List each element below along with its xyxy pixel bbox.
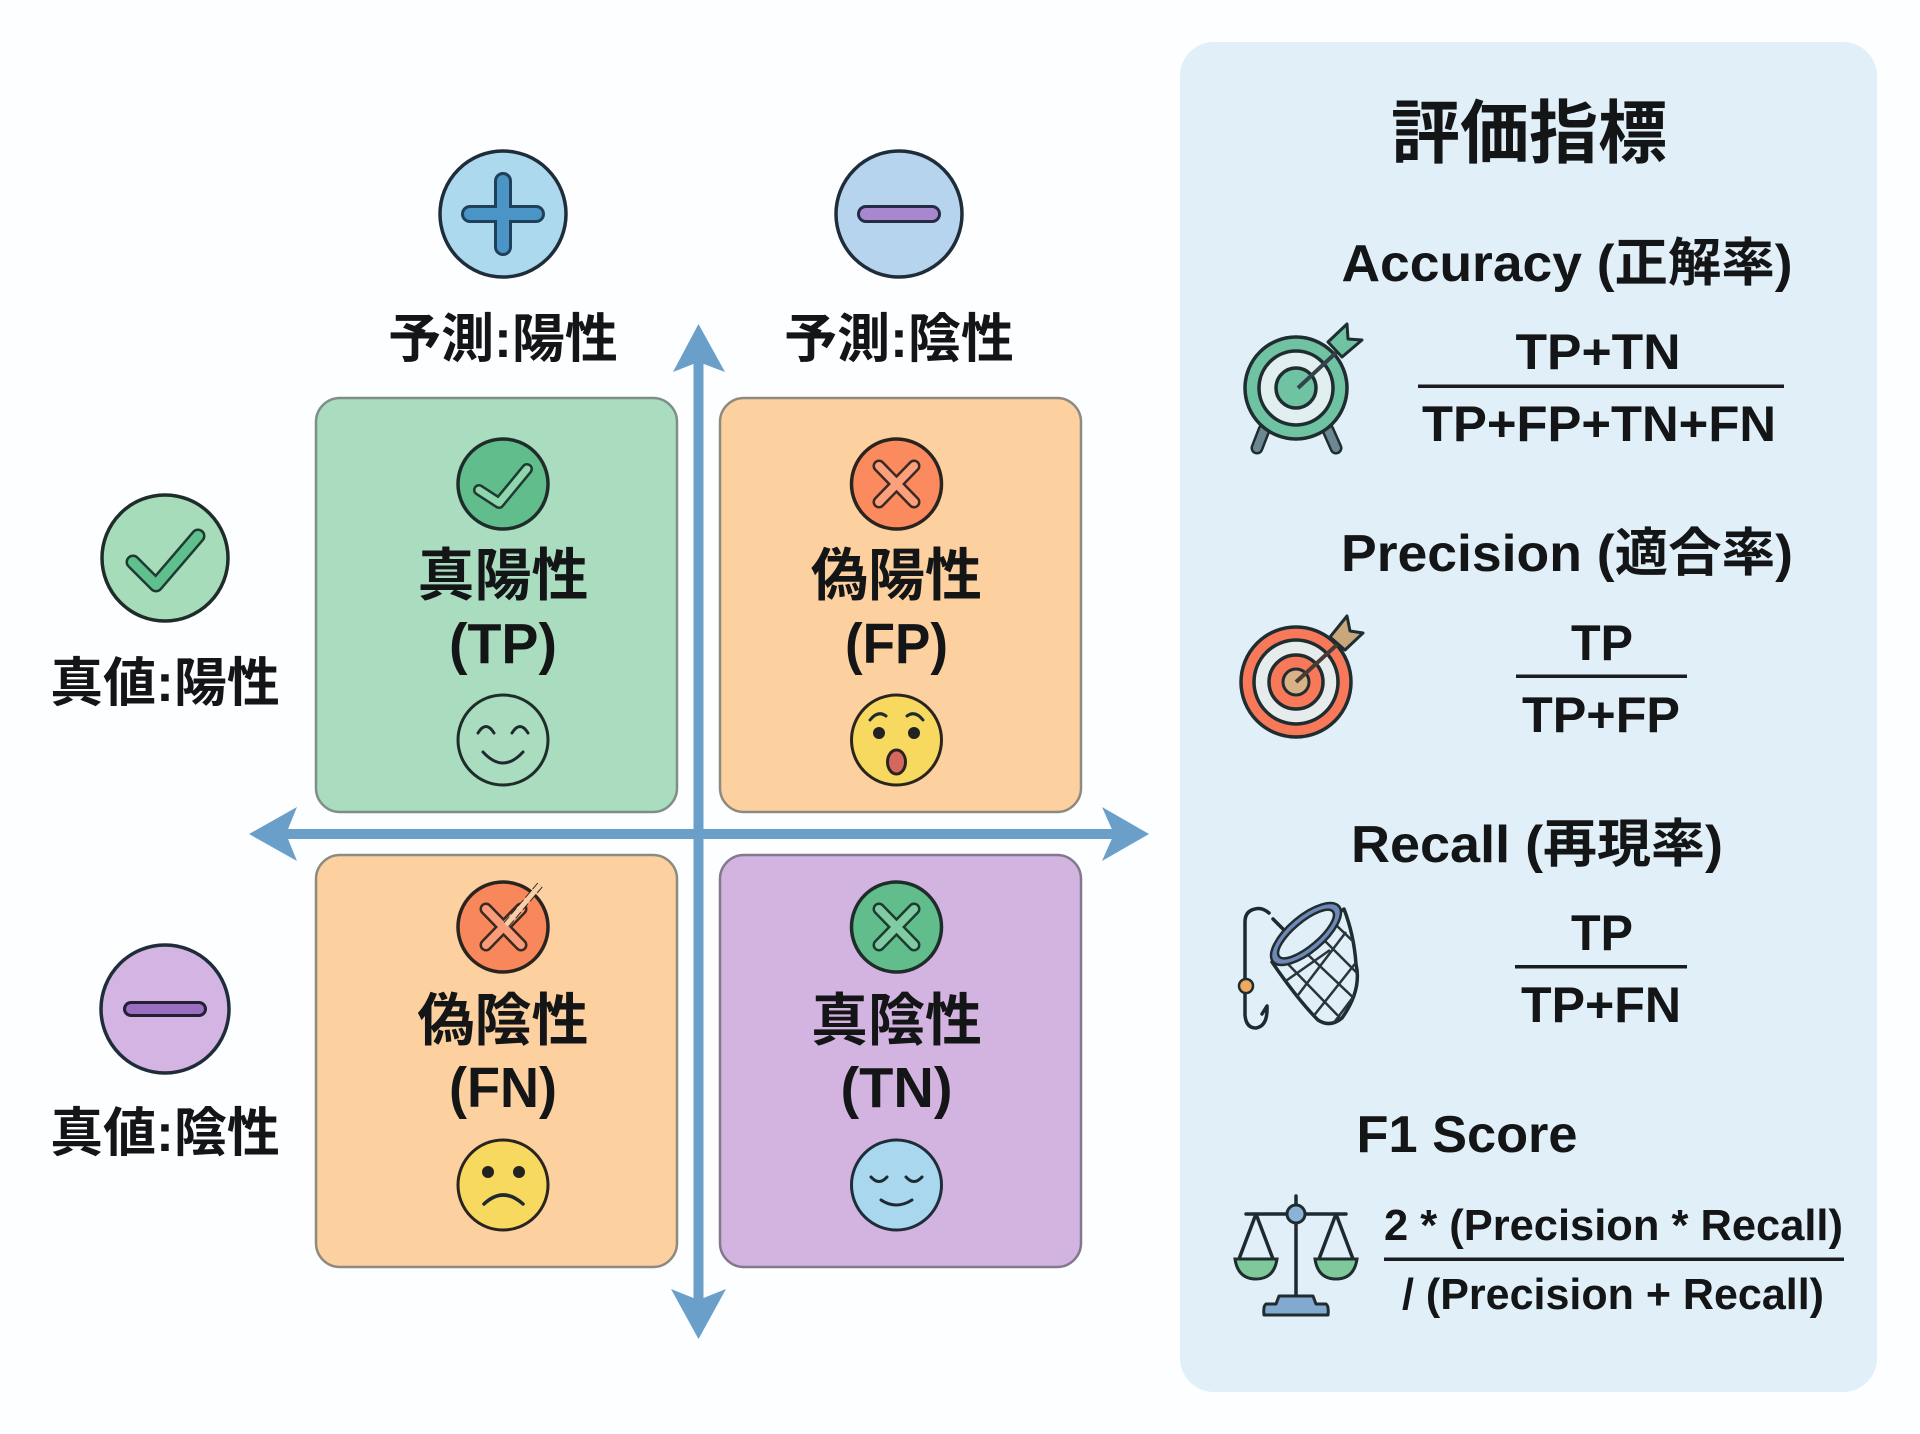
metric: accuracy (1245, 235, 1792, 452)
heading: actual positive: 真値:陽性 (50, 654, 280, 713)
icon: check (458, 439, 548, 529)
formula: precision: TP+FP (1522, 687, 1680, 743)
icon: smiling face (458, 695, 548, 785)
icon: cross with scratch (458, 882, 548, 972)
heading: actual negative: 真値:陰性 (50, 1104, 280, 1163)
label: TN: (TN) (840, 1056, 952, 1120)
formula: F1 score (1384, 1201, 1844, 1319)
panel: false negative (316, 855, 677, 1267)
formula: accuracy: TP+TN (1516, 324, 1680, 380)
icon: balance scales (1235, 1196, 1357, 1315)
label: false positive: 偽陽性 (811, 544, 982, 608)
metric: F1 score (1235, 1106, 1844, 1319)
label: true positive: 真陽性 (418, 544, 588, 608)
formula: F1 score: / (Precision + Recall) (1402, 1270, 1824, 1319)
panel: true negative (720, 855, 1081, 1267)
formula: recall: TP+FN (1521, 977, 1681, 1033)
heading: predicted negative: 予測:陰性 (784, 310, 1014, 369)
formula: precision: TP (1571, 615, 1633, 671)
formula: accuracy: TP+FP+TN+FN (1422, 396, 1776, 452)
label: TP: (TP) (449, 612, 557, 676)
label: false negative: 偽陰性 (418, 989, 588, 1053)
label: true negative: 真陰性 (811, 989, 982, 1053)
formula: recall: TP (1571, 905, 1633, 961)
icon: actual positive check (102, 495, 228, 621)
arrow: horizontal axis (249, 807, 1149, 861)
metric: precision (1241, 525, 1793, 743)
metric: recall (1239, 816, 1723, 1033)
icon: green target (1245, 324, 1362, 448)
icon: surprised face (852, 695, 942, 785)
label: F1 score: F1 Score (1356, 1106, 1578, 1164)
formula: accuracy (1418, 324, 1784, 452)
panel: evaluation metrics (1180, 42, 1877, 1392)
label: accuracy: Accuracy (正解率) (1342, 235, 1792, 293)
label: precision: Precision (適合率) (1341, 525, 1793, 583)
label: recall: Recall (再現率) (1351, 816, 1723, 874)
icon: cross green (852, 882, 942, 972)
icon: actual negative minus (101, 945, 229, 1073)
panel: false positive (720, 398, 1081, 812)
panel: true positive (316, 398, 677, 812)
icon: red target (1241, 616, 1363, 737)
formula: precision (1516, 615, 1687, 743)
heading: predicted positive: 予測:陽性 (388, 310, 618, 369)
label: FN: (FN) (449, 1056, 557, 1120)
arrow: vertical axis (671, 324, 726, 1339)
heading: metrics: 評価指標 (1391, 95, 1667, 172)
icon: sad face (458, 1140, 548, 1230)
label: FP: (FP) (845, 612, 948, 676)
icon: cross (852, 439, 942, 529)
formula: F1 score: 2 * (Precision * Recall) (1384, 1201, 1843, 1250)
icon: predicted positive plus (440, 151, 566, 277)
icon: calm face (852, 1140, 942, 1230)
formula: recall (1515, 905, 1687, 1033)
icon: predicted negative minus (836, 151, 962, 277)
icon: net and hook (1239, 893, 1362, 1028)
